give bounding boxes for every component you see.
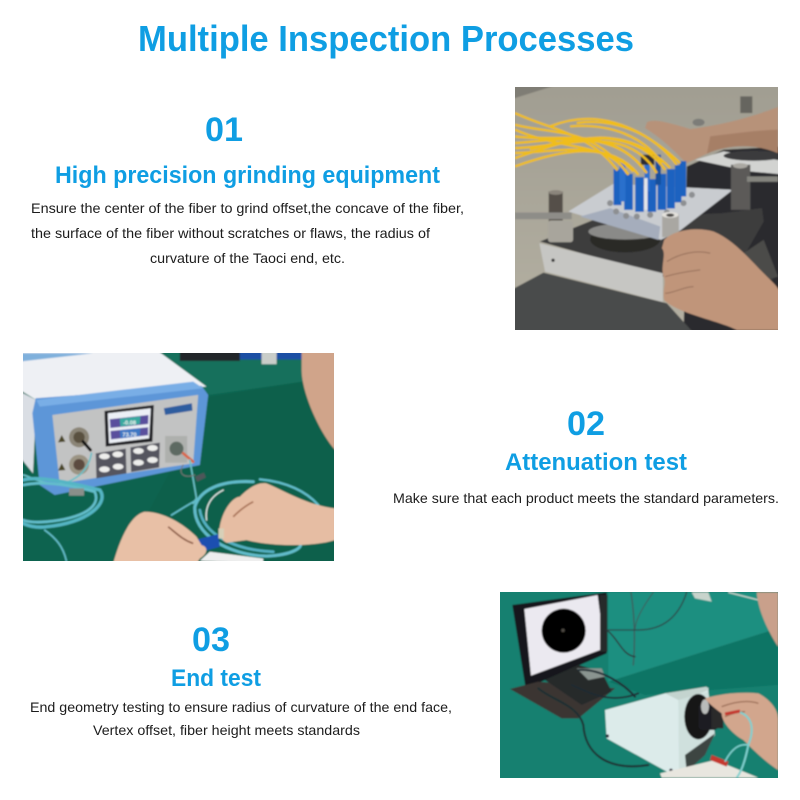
post left [515, 190, 573, 242]
description: step 01: curvature of the Taoci end, etc. [150, 250, 345, 266]
photo: attenuation tester [23, 353, 334, 561]
upper hand and arm [645, 107, 778, 163]
blue coupler [197, 534, 220, 552]
number 02: 02 [567, 405, 605, 443]
monitor base [510, 665, 615, 718]
blue connectors [613, 155, 686, 212]
lens barrel [684, 694, 723, 739]
display screen: -0.08 [123, 421, 136, 427]
description: step 03 [30, 699, 452, 738]
title: Multiple Inspection Processes [138, 18, 634, 59]
tester device [20, 350, 208, 495]
right hand [219, 483, 335, 545]
logo badge [164, 403, 193, 415]
photo: end face tester [500, 592, 778, 778]
post right [731, 163, 778, 210]
connector ports [58, 427, 187, 475]
cables [538, 592, 687, 766]
heading: end test: End test [171, 665, 261, 692]
number 03: 03 [192, 621, 230, 659]
description: step 03: End geometry testing to ensure radius of curvature of the end face, [30, 699, 452, 715]
description: step 01: the surface of the fiber without scratches or flaws, the radius of [31, 225, 430, 241]
paper and connector [660, 760, 758, 778]
head at right [757, 592, 778, 647]
display screen [104, 405, 154, 447]
bolt [662, 212, 679, 237]
hand [705, 693, 778, 770]
description: step 03: Vertex offset, fiber height meets standards [93, 722, 360, 738]
monitor [512, 592, 607, 688]
panel: step 03 text [30, 621, 452, 738]
panel: step 02 text [393, 405, 779, 506]
description: step 02: Make sure that each product meets the standard parameters. [393, 490, 779, 506]
yellow fibers [515, 113, 680, 175]
heading: high precision grinding equipment: High precision grinding equipment [55, 162, 440, 189]
keypads [96, 443, 160, 478]
display screen: 73.70 [122, 432, 137, 438]
description: step 01: Ensure the center of the fiber to grind offset,the concave of the fiber, [31, 200, 464, 216]
sleeve and head at right [302, 350, 335, 450]
inspection scope [605, 687, 715, 778]
plate screws [607, 192, 695, 220]
lower hand [662, 229, 780, 330]
paper sheet [200, 552, 263, 563]
panel: step 01 text [31, 111, 464, 266]
heading: attenuation test: Attenuation test [505, 449, 687, 476]
fiber with red boot [725, 711, 740, 714]
photo: grinding equipment [515, 87, 778, 330]
test cables [23, 442, 318, 561]
left hand [113, 512, 206, 563]
number 01: 01 [205, 111, 243, 149]
description: step 01 [31, 200, 464, 266]
